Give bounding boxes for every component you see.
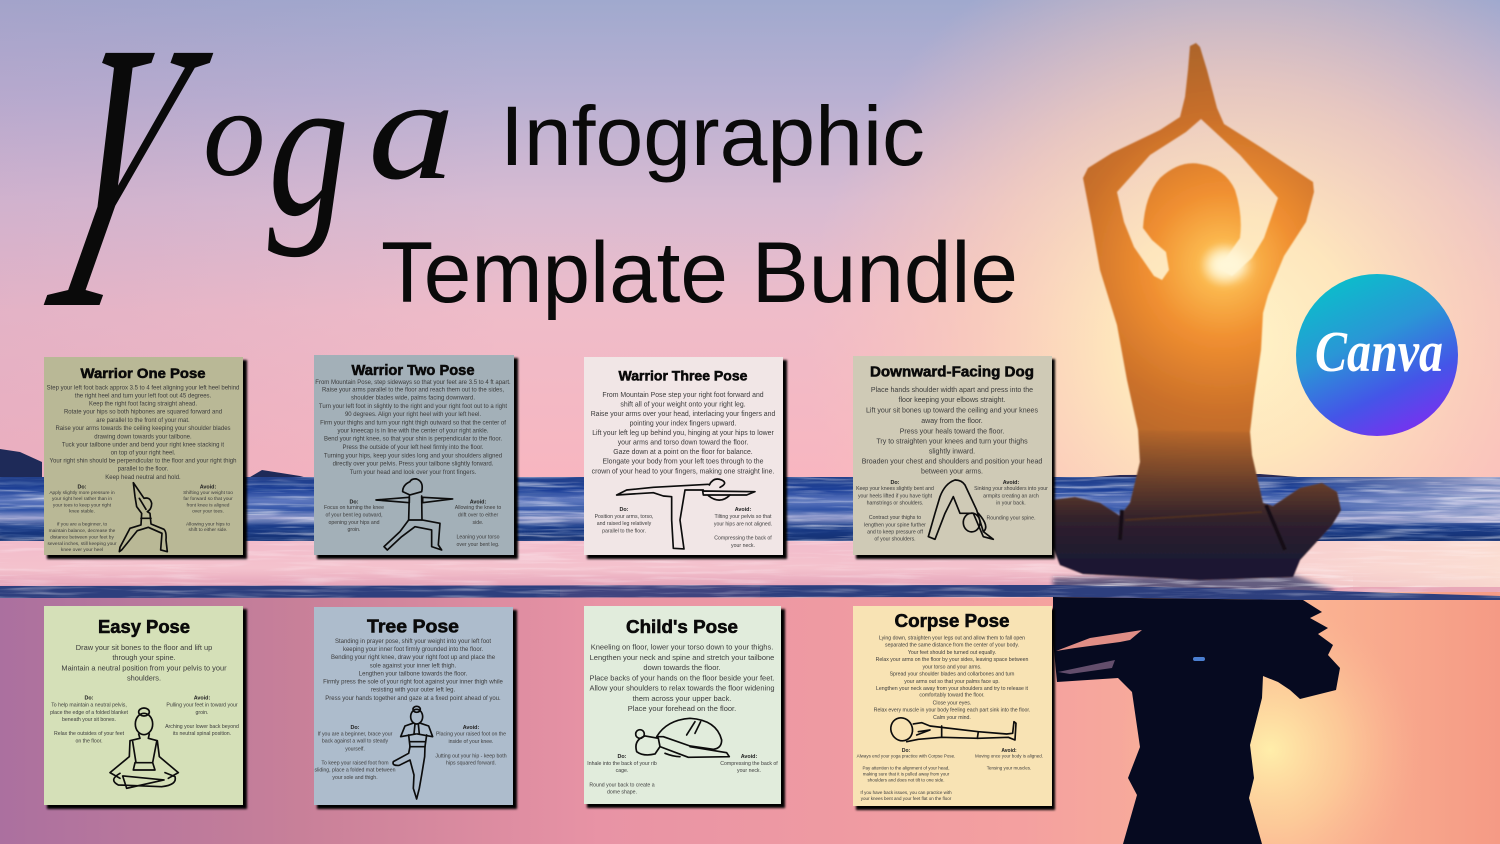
avoid list: shift to either side. — [189, 527, 227, 533]
do list: If you are a beginner, to — [57, 522, 108, 528]
avoid list: Arching your lower back beyond — [165, 724, 239, 730]
instructions: Lengthen your neck away from your shoulders and try to release it — [876, 686, 1029, 692]
icon: child's pose figure — [636, 718, 729, 757]
instructions: Elongate your body from your left toes through to the — [603, 459, 764, 466]
instructions: Place backs of your hands on the floor beside your feet. — [589, 673, 775, 682]
avoid list: Moving once your body is aligned. — [975, 754, 1043, 758]
instructions: parallel to the floor. — [118, 467, 169, 473]
instructions: through your spine. — [112, 653, 176, 662]
avoid list: groin. — [196, 710, 208, 716]
instructions: Turning your hips, keep your sides long and your shoulders aligned — [324, 453, 502, 459]
avoid list — [975, 748, 1043, 770]
instructions: Maintain a neutral position from your pelvis to your — [61, 663, 227, 672]
instructions: Raise your arms towards the ceiling keeping your shoulder blades — [55, 426, 231, 432]
instructions: the right heel and turn your left foot out 45 degrees. — [75, 394, 212, 400]
instructions: your kneecap is in line with the center of your right ankle. — [337, 429, 489, 435]
avoid list: Compressing the back of — [720, 761, 778, 767]
do list: several inches, still keeping your — [47, 541, 117, 547]
instructions: Press the outside of your left heel firmly into the floor. — [342, 445, 484, 451]
Canva badge: Canva — [1315, 319, 1443, 384]
do list — [324, 500, 384, 533]
heading: Warrior Three Pose — [618, 368, 748, 384]
do list: To keep your raised foot from — [321, 761, 389, 767]
instructions: keeping your inner foot firmly grounded into the floor. — [343, 647, 483, 653]
do list: yourself. — [345, 746, 365, 752]
do list: To help maintain a neutral pelvis, — [51, 702, 127, 708]
instructions: down towards the floor. — [643, 663, 721, 672]
wet sand — [0, 541, 1500, 598]
instructions: Close your eyes. — [933, 700, 971, 706]
instructions: floor keeping your elbows straight. — [899, 397, 1006, 404]
do list: Apply slightly more pressure in — [49, 490, 115, 496]
instructions: Keep the right foot facing straight ahead. — [89, 401, 197, 407]
card background — [853, 356, 1052, 555]
title: Template Bundle: Template Bundle — [381, 225, 1018, 321]
instructions: Relax every muscle in your body feeling each part sink into the floor. — [874, 708, 1030, 714]
instructions: Gaze down at a point on the floor for balance. — [613, 449, 753, 456]
do list: and raised leg relatively — [597, 521, 652, 527]
card: Easy Pose — [44, 606, 247, 809]
icon: corpse pose figure — [887, 714, 1016, 744]
instructions — [874, 636, 1030, 721]
heading: Easy Pose — [98, 617, 190, 637]
do list: of your bent leg outward, — [325, 512, 383, 518]
instructions: Bending your right knee, draw your right foot up and place the — [331, 655, 496, 661]
card: Downward-Facing Dog — [853, 356, 1055, 559]
instructions: Rotate your hips so both hipbones are squared forward and — [64, 410, 222, 416]
card: Warrior One Pose — [44, 357, 247, 559]
instructions: your arms out so that your palms face up. — [904, 679, 1000, 685]
avoid list: its neutral spinal position. — [173, 731, 231, 737]
icon: tree pose figure — [393, 706, 433, 799]
avoid list — [455, 500, 501, 548]
instructions: your arms and torso down toward the floor. — [618, 440, 748, 447]
avoid list: armpits creating an arch — [983, 493, 1039, 499]
avoid list: far forward so that your — [183, 496, 233, 502]
sun flare — [1208, 250, 1248, 280]
instructions — [862, 387, 1042, 476]
instructions: directly over your pelvis. Press your tailbone slightly forward. — [333, 462, 494, 468]
instructions: Relax your arms on the floor by your sides, leaving space between — [876, 657, 1029, 663]
instructions: shoulders. — [127, 674, 161, 682]
title: Yoga script: o — [203, 65, 266, 203]
title: Yoga script: a — [368, 49, 455, 210]
avoid list — [435, 725, 507, 767]
do list: of your shoulders. — [874, 536, 916, 542]
do list: Do: — [618, 754, 627, 760]
do list: opening your hips and — [328, 520, 380, 526]
instructions: away from the floor. — [921, 418, 983, 425]
avoid list: Allowing the knee to — [455, 505, 501, 511]
avoid list: Avoid: — [1003, 480, 1019, 486]
avoid list: Avoid: — [1001, 748, 1017, 754]
avoid list: Avoid: — [741, 754, 757, 760]
card: Warrior Two Pose — [314, 355, 518, 559]
icon: warrior three figure — [617, 479, 755, 549]
instructions: your torso and your arms. — [922, 664, 982, 670]
do list: cage. — [616, 768, 628, 774]
water reflection — [0, 592, 1500, 844]
do list — [856, 480, 934, 542]
instructions — [589, 642, 775, 713]
do list: Round your back to create a — [589, 782, 655, 788]
instructions: shift all of your weight onto your right leg. — [620, 402, 746, 409]
avoid list: Placing your raised foot on the — [436, 732, 506, 738]
instructions: Tuck your tailbone under and bend your right knee stacking it — [62, 442, 224, 448]
heading: Warrior One Pose — [80, 365, 206, 381]
do list: Keep your knees slightly bent and — [856, 486, 934, 492]
heading: Warrior Two Pose — [352, 363, 474, 379]
instructions: drawing down towards your tailbone. — [94, 434, 192, 440]
instructions: Try to straighten your knees and turn your thighs — [876, 439, 1028, 446]
avoid list: inside of your knee. — [448, 739, 494, 745]
instructions: Draw your sit bones to the floor and lift up — [76, 643, 212, 652]
avoid list: over your bent leg. — [457, 542, 499, 548]
do list: Pay attention to the alignment of your head, — [862, 766, 950, 770]
avoid list: drift over to either — [458, 512, 498, 518]
avoid list: Jutting out your hip - keep both — [435, 753, 507, 759]
avoid list: Tensing your muscles. — [987, 766, 1031, 770]
instructions: Lengthen your neck and spine and stretch your tailbone — [590, 653, 774, 662]
ocean waves — [0, 477, 1500, 543]
do list: hamstrings or shoulders. — [867, 500, 923, 506]
do list: beneath your sit bones. — [62, 717, 116, 723]
do list: If you have back issues, you can practice with — [860, 790, 952, 795]
instructions: Kneeling on floor, lower your torso down to your thighs. — [591, 642, 773, 652]
do list: Relax the outsides of your feet — [54, 731, 125, 737]
instructions: Firmly press the sole of your right foot against your inner thigh while — [323, 680, 504, 686]
instructions — [47, 385, 239, 481]
card background — [584, 606, 781, 804]
instructions: resisting with your outer left leg. — [371, 688, 456, 694]
avoid list: front knee is aligned — [187, 502, 230, 508]
do list: your sole and thigh. — [332, 775, 378, 781]
avoid list: Avoid: — [735, 507, 751, 513]
instructions — [315, 380, 511, 476]
instructions: Your right shin should be perpendicular to the floor and your right thigh — [50, 459, 236, 465]
avoid list: Rounding your spine. — [986, 516, 1036, 522]
instructions: From Mountain Pose step your right foot forward and — [602, 392, 764, 399]
card: Corpse Pose — [853, 606, 1055, 810]
instructions: Firm your thighs and turn your right thigh outward so that the center of — [320, 420, 506, 426]
do list: parallel to the floor. — [602, 528, 646, 534]
do list: place the edge of a folded blanket — [50, 710, 128, 716]
card: Child's Pose — [584, 606, 785, 808]
instructions — [323, 639, 504, 702]
instructions: sole against your inner left thigh. — [370, 663, 457, 669]
instructions: Place your forehead on the floor. — [628, 704, 736, 713]
shoreline band — [0, 585, 1500, 600]
instructions: between your arms. — [921, 469, 983, 476]
instructions: Your feet should be turned out equally. — [908, 650, 996, 656]
do list — [587, 754, 657, 796]
avoid list: over your toes. — [192, 508, 224, 514]
instructions: crown of your head to your fingers, making one straight line. — [592, 468, 774, 476]
do list: shoulders and does not tilt to one side. — [867, 778, 945, 782]
avoid list: Allowing your hips to — [186, 522, 230, 528]
do list: Inhale into the back of your rib — [587, 761, 657, 767]
icon: downward dog figure — [928, 480, 993, 539]
avoid list: Avoid: — [194, 696, 210, 702]
yogi silhouette — [1052, 43, 1341, 580]
avoid list: Avoid: — [470, 500, 486, 506]
card: Tree Pose — [314, 607, 517, 809]
sunset sky background — [0, 0, 1500, 480]
do list: Do: — [891, 480, 900, 486]
avoid list — [974, 480, 1048, 522]
instructions: Turn your left foot in slightly to the right and your right foot out to a right — [319, 404, 507, 410]
card background — [44, 357, 243, 555]
instructions: Allow your shoulders to relax towards the floor widening — [589, 684, 775, 693]
instructions: Press your hands together and gaze at a fixed point ahead of you. — [325, 696, 501, 702]
avoid list: Leaning your torso — [457, 534, 500, 540]
do list: making sure that it is pulled away from your — [863, 772, 950, 776]
instructions: are parallel to the front of your mat. — [96, 418, 190, 424]
do list: your toes to keep your right — [53, 502, 112, 508]
do list: sliding, place a folded mat between — [314, 768, 396, 774]
title: Infographic: Infographic — [500, 89, 925, 183]
heading: Child's Pose — [626, 617, 738, 637]
instructions: Spread your shoulder blades and collarbones and turn — [890, 672, 1015, 678]
icon: easy pose figure — [110, 708, 178, 788]
do list: and to keep pressure off — [867, 529, 923, 535]
do list: on the floor. — [75, 738, 103, 744]
do list: your knees bent and your feet flat on the floor — [861, 796, 952, 801]
card background — [314, 355, 514, 555]
instructions: Lift your sit bones up toward the ceiling and your knees — [866, 408, 1038, 415]
title: Yoga script — [4, 0, 455, 389]
reflection of the yogi — [1053, 597, 1340, 844]
instructions: comfortably toward the floor. — [919, 693, 985, 699]
do list: Do: — [351, 725, 360, 731]
instructions: Turn your head and look over your front fingers. — [350, 470, 477, 476]
Canva badge — [1296, 274, 1458, 436]
avoid list: Compressing the back of — [714, 536, 772, 542]
instructions: Step your left foot back approx 3.5 to 4 feet aligning your left heel behind — [47, 385, 239, 391]
instructions — [61, 643, 227, 682]
do list: knee stable. — [69, 508, 95, 514]
instructions: Lift your left leg up behind you, hinging at your hips to lower — [592, 430, 774, 437]
avoid list: Avoid: — [463, 725, 479, 731]
instructions: Calm your mind. — [933, 715, 971, 721]
card background — [853, 606, 1052, 806]
instructions: on top of your right heel. — [111, 450, 176, 456]
do list: Do: — [78, 484, 87, 490]
do list: Always end your yoga practice with Corpse Pose. — [857, 754, 955, 758]
instructions — [591, 392, 775, 476]
do list: Do: — [620, 507, 629, 513]
instructions: Bend your right knee, so that your shin is perpendicular to the floor. — [324, 437, 502, 443]
instructions: separated the same distance from the center of your body. — [885, 642, 1019, 648]
instructions: Raise your arms parallel to the floor and reach them out to the sides, — [322, 388, 504, 394]
card: Warrior Three Pose — [584, 357, 787, 559]
instructions: Press your heals toward the floor. — [900, 428, 1004, 435]
do list — [857, 748, 955, 801]
icon: warrior two figure — [376, 479, 453, 550]
instructions: 90 degrees. Align your right heel with your left heel. — [345, 412, 481, 418]
instructions: From Mountain Pose, step sideways so that your feet are 3.5 to 4 ft apart. — [315, 380, 511, 386]
do list: Contract your thighs to — [869, 515, 921, 521]
do list: your heels lifted if you have tight — [858, 493, 933, 499]
do list — [314, 725, 396, 781]
avoid list: side. — [473, 520, 483, 526]
avoid list: your neck. — [731, 543, 755, 549]
avoid list — [183, 484, 233, 533]
avoid list: in your back. — [996, 500, 1026, 506]
instructions: Broaden your chest and shoulders and position your head — [862, 459, 1042, 466]
do list: Focus on turning the knee — [324, 505, 384, 511]
card background — [584, 357, 783, 555]
avoid list — [165, 696, 239, 737]
do list: Do: — [902, 748, 910, 754]
do list: dome shape. — [607, 790, 637, 796]
instructions: them across your upper back. — [633, 694, 731, 703]
card background — [44, 606, 243, 805]
avoid list: your hips are not aligned. — [714, 521, 772, 527]
do list: groin. — [348, 527, 360, 533]
instructions: slightly inward. — [929, 449, 975, 456]
card background — [314, 607, 513, 805]
heading: Corpse Pose — [894, 611, 1010, 631]
instructions: Standing in prayer pose, shift your weight into your left foot — [335, 639, 491, 645]
heading: Downward-Facing Dog — [870, 365, 1034, 381]
do list: knee over your heel — [61, 547, 103, 553]
do list: If you are a beginner, brace your — [318, 732, 393, 738]
do list — [595, 507, 653, 534]
avoid list: Avoid: — [200, 484, 216, 490]
heading: Tree Pose — [367, 617, 459, 637]
do list: back against a wall to steady — [322, 739, 389, 745]
instructions: shoulder blades wide, palms facing downward. — [351, 396, 475, 402]
instructions: Lengthen your tailbone towards the floor. — [359, 671, 468, 677]
do list: Position your arms, torso, — [595, 514, 653, 520]
instructions: Place hands shoulder width apart and press into the — [871, 387, 1033, 394]
instructions: Keep head neutral and hold. — [105, 475, 181, 481]
distant hills — [0, 449, 1360, 480]
instructions: Raise your arms over your head, interlacing your fingers and — [591, 411, 775, 418]
do list — [50, 696, 128, 744]
do list: lengthen your spine further — [864, 522, 926, 528]
do list: Do: — [85, 696, 94, 702]
title: Yoga script: g — [268, 33, 349, 258]
icon: warrior one figure — [119, 483, 167, 552]
do list: distance between your feet by — [50, 534, 114, 540]
do list — [47, 484, 117, 553]
avoid list: your neck. — [737, 768, 761, 774]
do list: Do: — [350, 500, 359, 506]
instructions: pointing your index fingers upward. — [630, 421, 737, 428]
do list: your right heel rather than in — [52, 496, 112, 502]
avoid list: hips squared forward. — [446, 761, 496, 767]
do list: maintain balance, decrease the — [49, 528, 116, 534]
avoid list: Pulling your feet in toward your — [166, 702, 238, 708]
avoid list: Sinking your shoulders into your — [974, 486, 1048, 492]
avoid list: Tilting your pelvis so that — [715, 514, 772, 520]
avoid list — [714, 507, 772, 549]
avoid list — [720, 754, 778, 774]
instructions: Lying down, straighten your legs out and allow them to fall open — [879, 636, 1025, 642]
avoid list: Shifting your weight too — [183, 490, 233, 496]
